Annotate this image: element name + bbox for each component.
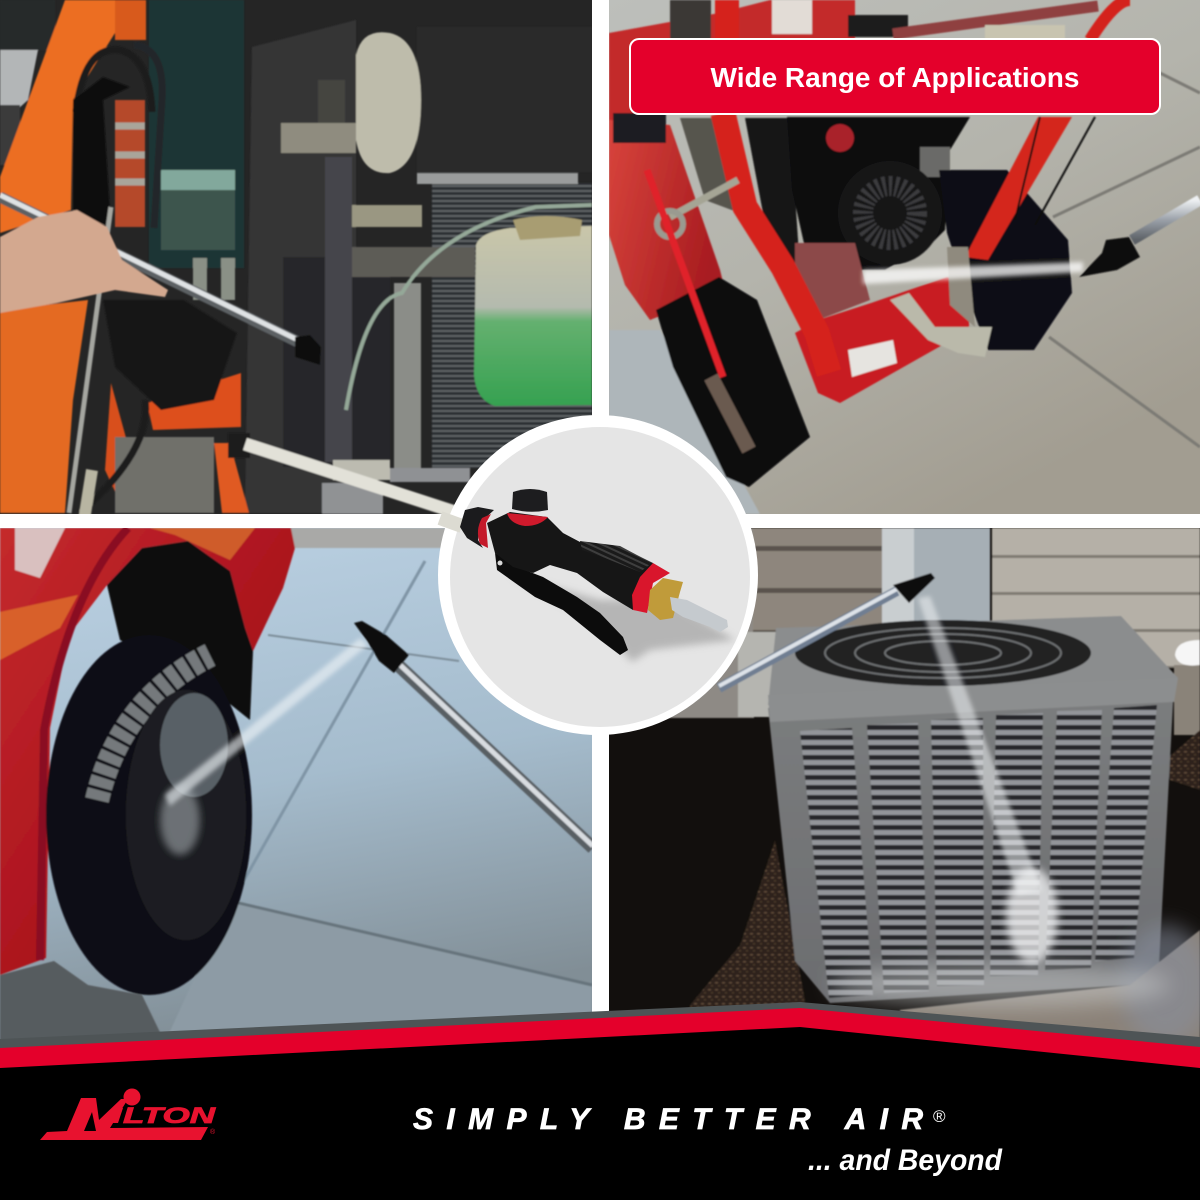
panel: air conditioner photo — [609, 528, 1200, 1053]
panel: snow blower photo — [609, 0, 1200, 514]
banner: Wide Range of Applications: Wide Range of Applications — [711, 62, 1079, 93]
blow gun wand — [440, 518, 462, 526]
gun nozzle cap — [460, 507, 494, 548]
logo: Milton: ® — [210, 1128, 216, 1136]
product shadow — [510, 575, 735, 662]
footer band — [0, 1002, 1200, 1200]
gun top knob — [512, 489, 548, 512]
gun grip ribs — [580, 541, 652, 572]
gun pivot screw — [498, 560, 502, 566]
tagline: and Beyond: ... and Beyond — [808, 1144, 1003, 1177]
icon: blow gun product — [460, 489, 735, 662]
gun steel plug — [670, 597, 728, 632]
panel: car wheel photo — [0, 528, 593, 1053]
gun brass fitting — [648, 578, 683, 620]
logo: Milton: LTON — [123, 1103, 217, 1128]
tagline: Simply Better Air: SIMPLY BETTER AIR — [413, 1103, 923, 1136]
gun trigger — [495, 553, 628, 655]
product circle — [438, 415, 758, 735]
gun front red ring — [478, 514, 491, 548]
gun rear red ring — [632, 563, 670, 613]
gun red collar — [507, 513, 548, 526]
tagline: Simply Better Air: ® — [933, 1107, 946, 1126]
panel: tractor radiator photo — [0, 0, 592, 520]
gun handle body — [487, 512, 653, 610]
logo: Milton — [40, 1088, 217, 1140]
banner: Wide Range of Applications — [630, 39, 1160, 114]
